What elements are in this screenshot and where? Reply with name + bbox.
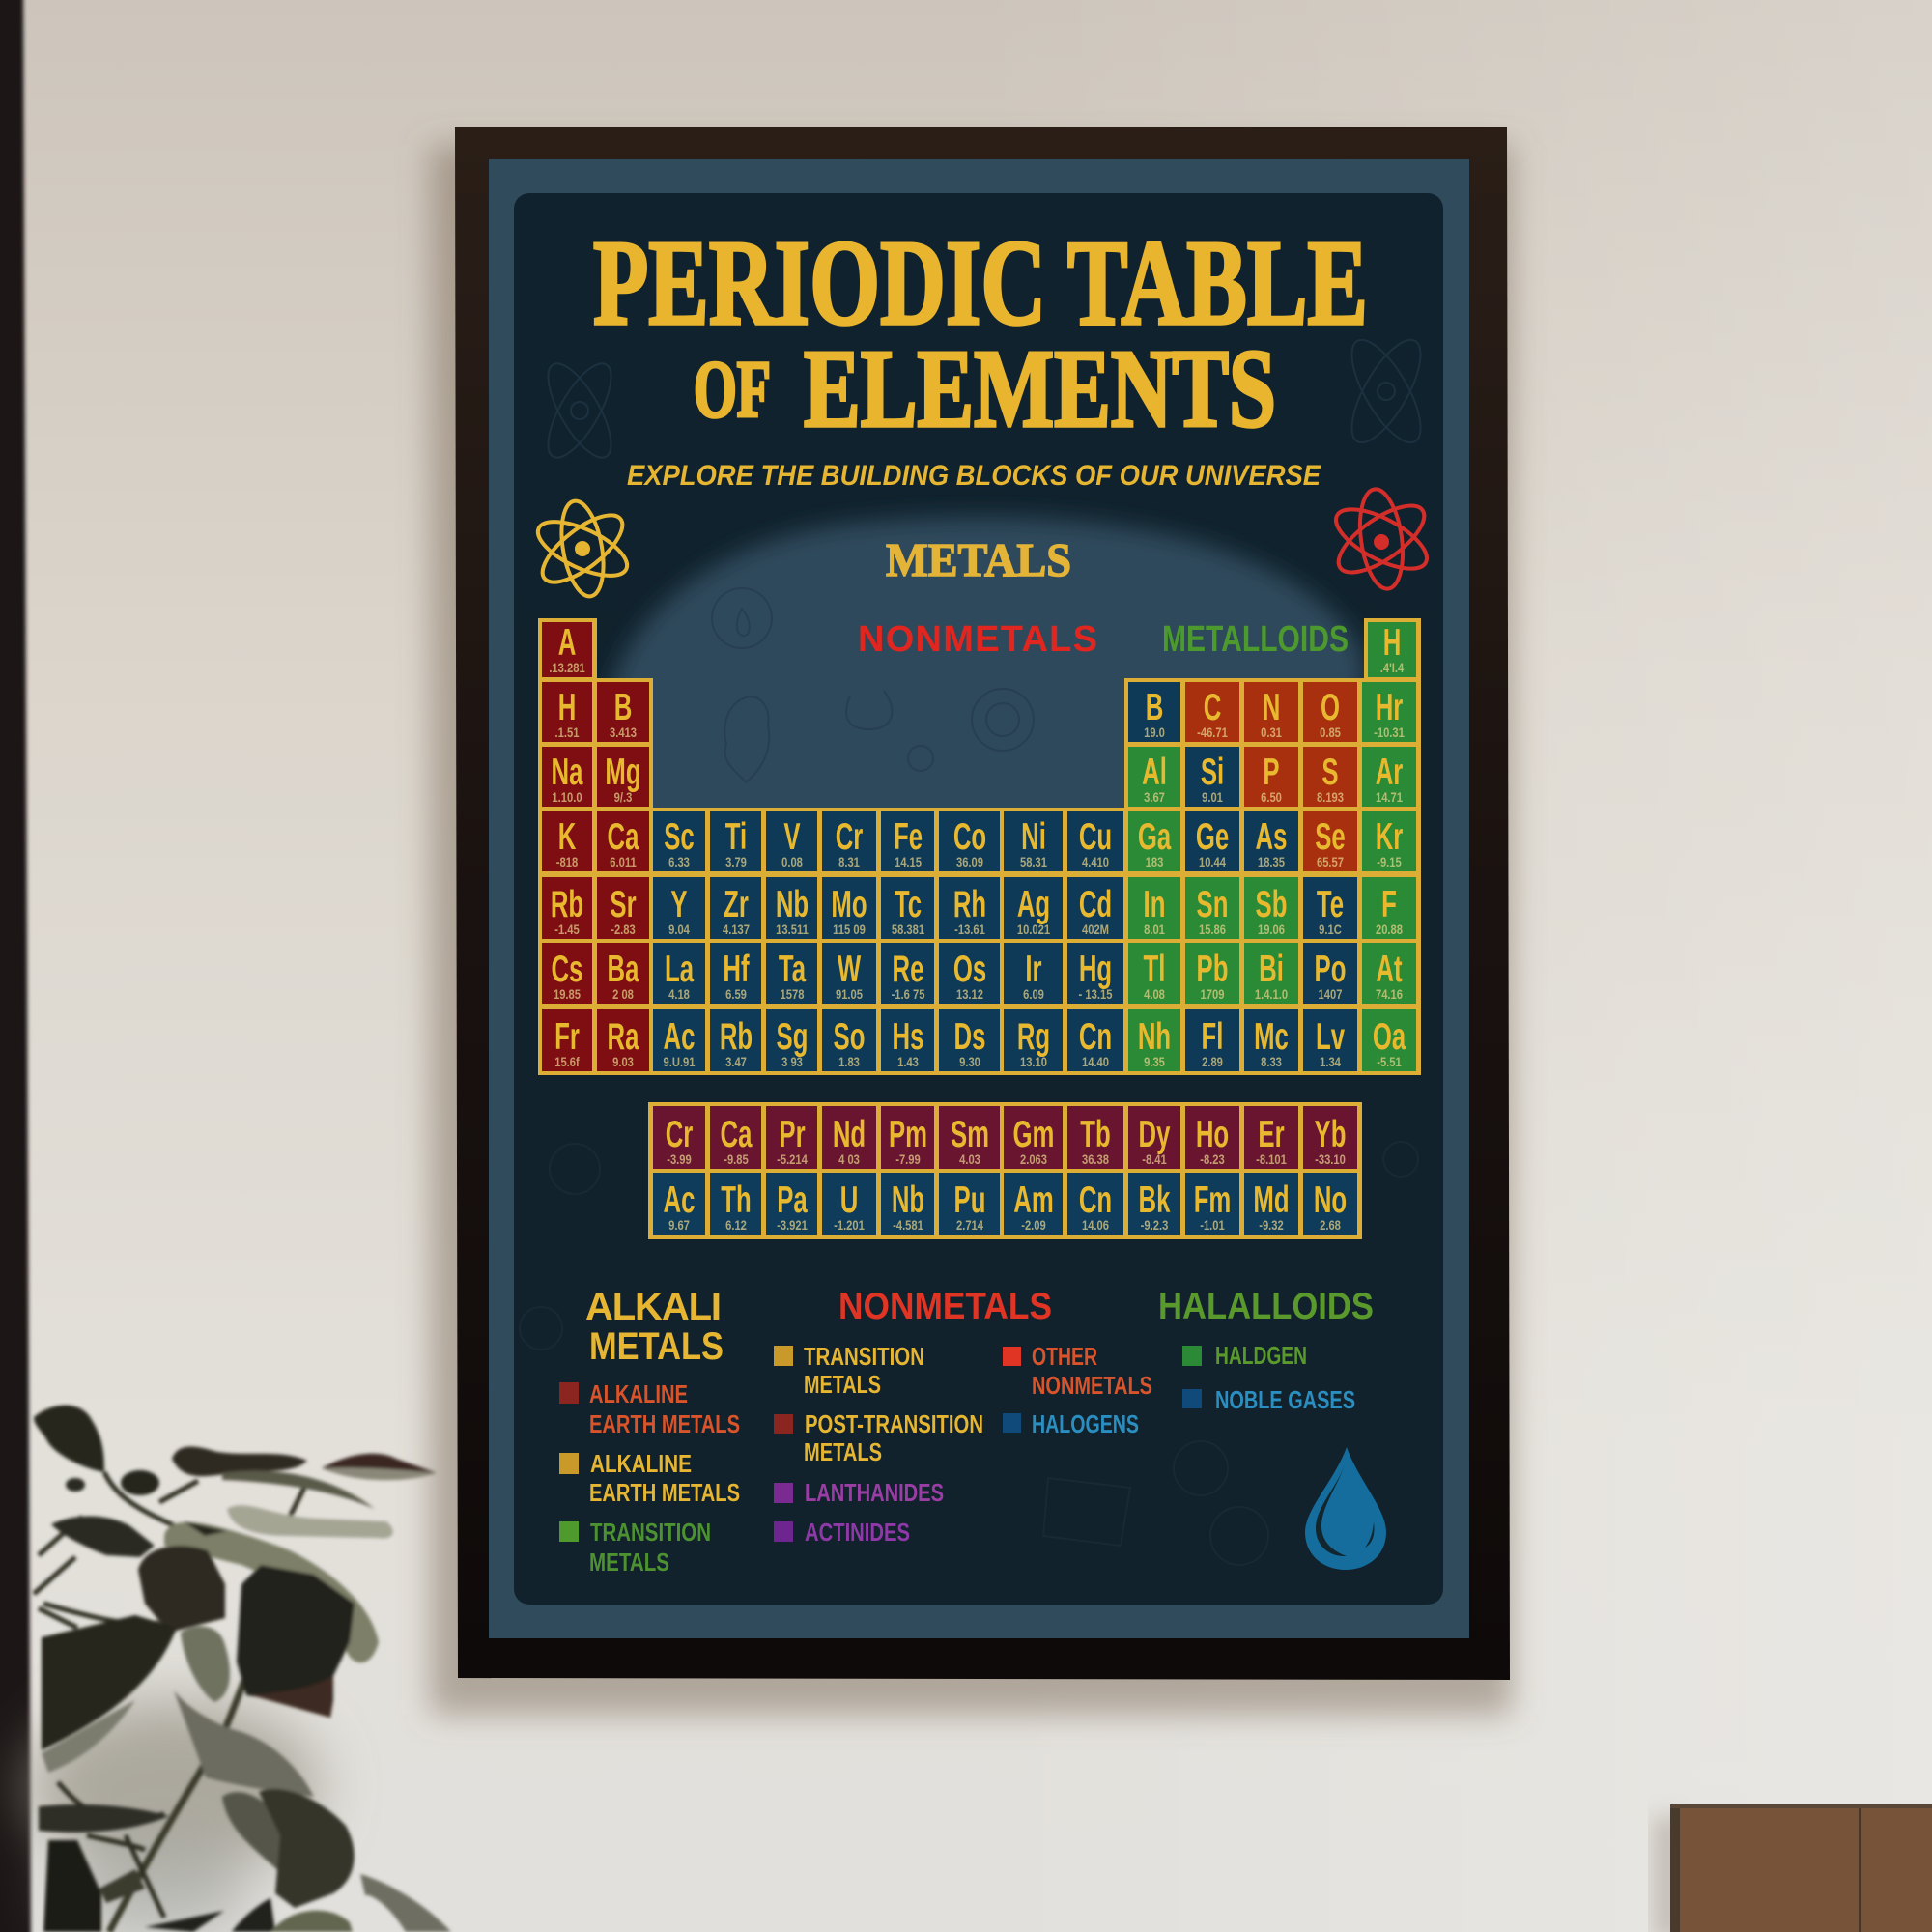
table row 3: Al — [1142, 752, 1167, 793]
table row 5: 4.137 — [722, 922, 750, 937]
table row 7: 1.83 — [838, 1054, 860, 1069]
table row 5: Zr — [724, 884, 748, 925]
actinide row: -3.921 — [777, 1217, 807, 1233]
table row 6: 13.12 — [955, 986, 983, 1002]
legend heading: alkali metals — [585, 1286, 724, 1368]
lanthanide row: Yb — [1315, 1114, 1346, 1155]
table row 4: 6.33 — [668, 854, 690, 869]
table row 7: 15.6f — [554, 1054, 580, 1069]
table row 5 — [542, 877, 1416, 939]
table row 4: 58.31 — [1019, 854, 1047, 869]
icon: water drop — [1305, 1447, 1386, 1570]
table row 6: 19.85 — [554, 986, 581, 1002]
table row 5: Rh — [952, 884, 986, 925]
table row 2: 0.31 — [1261, 724, 1282, 740]
table row 7: Fl — [1202, 1016, 1223, 1058]
table row 2: B — [1146, 687, 1163, 728]
table row 4: Cu — [1079, 816, 1112, 858]
actinide row: 6.12 — [725, 1217, 746, 1233]
table row 5: Ag — [1016, 884, 1050, 925]
table row 3: P — [1263, 752, 1280, 793]
table row 7: Nh — [1138, 1016, 1171, 1058]
actinide row: -1.01 — [1200, 1217, 1225, 1233]
poster dark inner panel — [514, 193, 1443, 1605]
table row 7: 9.U.91 — [663, 1054, 696, 1069]
legend item: lanthanides: LANTHANIDES — [805, 1478, 944, 1507]
table row 4: Se — [1315, 816, 1346, 858]
table row 6: -1.6 75 — [891, 986, 924, 1002]
table row 6: La — [665, 949, 694, 990]
legend item: post-transition metals: METALS — [804, 1437, 882, 1466]
table row 7: Ra — [608, 1016, 639, 1058]
subtitle: EXPLORE THE BUILDING BLOCKS OF OUR UNIVERSE — [627, 460, 1321, 492]
table row 7: 3 93 — [781, 1054, 802, 1069]
actinide row: Pa — [777, 1179, 807, 1221]
legend item: alkaline earth metals gold: ALKALINE — [590, 1449, 692, 1478]
table row 6: 1.4.1.0 — [1255, 986, 1288, 1002]
table row 5: 20.88 — [1376, 922, 1403, 937]
table row 1: .4'I.4 — [1380, 660, 1404, 675]
table row 5: F — [1381, 884, 1397, 925]
potted plant leaves — [34, 1406, 451, 1932]
table row 2: 3.413 — [610, 724, 637, 740]
lanthanide row: Cr — [666, 1114, 693, 1155]
actinide row: Nb — [891, 1179, 924, 1221]
table row 7: Fr — [554, 1016, 580, 1058]
table row 5: 8.01 — [1144, 922, 1165, 937]
legend item: other nonmetals: NONMETALS — [1032, 1371, 1152, 1400]
table row 7: Cn — [1079, 1016, 1112, 1058]
table row 7: 14.40 — [1082, 1054, 1109, 1069]
lanthanide row: Gm — [1012, 1114, 1054, 1155]
table row 3: 8.193 — [1317, 789, 1344, 805]
table row 7: 9.30 — [959, 1054, 980, 1069]
table row 5: Y — [670, 884, 688, 925]
dark door frame strip at left edge — [0, 0, 31, 1932]
legend item: lanthanides — [774, 1478, 944, 1507]
lanthanide row: Er — [1258, 1114, 1285, 1155]
table row 5: Rb — [551, 884, 583, 925]
legend item: alkaline earth metals red — [559, 1379, 740, 1438]
lanthanide row — [653, 1106, 1357, 1169]
table row 3: S — [1321, 752, 1339, 793]
table row 6: Pb — [1197, 949, 1228, 990]
table row 5: Mo — [831, 884, 867, 925]
table row 2: B — [614, 687, 632, 728]
table row 4: Ni — [1021, 816, 1045, 858]
heading: metals: METALS — [886, 533, 1071, 586]
table row 4: Ge — [1196, 816, 1229, 858]
table row 7: Ac — [664, 1016, 695, 1058]
table row 6: Po — [1315, 949, 1346, 990]
title: ELEMENTS — [804, 327, 1276, 451]
legend item: transition metals green: TRANSITION — [590, 1518, 711, 1547]
table row 4: Ti — [724, 816, 747, 858]
table row 6: 1709 — [1201, 986, 1224, 1002]
legend item: noble gases — [1182, 1385, 1355, 1414]
lanthanide row: -8.41 — [1142, 1151, 1167, 1167]
table row 6: 1407 — [1319, 986, 1342, 1002]
legend item: actinides: ACTINIDES — [805, 1518, 910, 1547]
lanthanide row: Nd — [833, 1114, 866, 1155]
table row 7: Hs — [892, 1016, 923, 1058]
frame shadow on wall — [430, 145, 1512, 1715]
table row 6: 74.16 — [1376, 986, 1403, 1002]
table row 7: So — [834, 1016, 865, 1058]
lanthanide row: Ca — [720, 1114, 752, 1155]
wooden furniture corner — [1654, 1804, 1932, 1932]
table row 4: As — [1256, 816, 1287, 858]
table row 4: Kr — [1376, 816, 1403, 858]
actinide row: -2.09 — [1021, 1217, 1045, 1233]
table row 7: Mc — [1254, 1016, 1289, 1058]
table row 6: Ir — [1025, 949, 1041, 990]
lanthanide row: Sm — [950, 1114, 989, 1155]
table row 4: 4.410 — [1082, 854, 1109, 869]
table row 4: 18.35 — [1258, 854, 1285, 869]
table row 4: Ga — [1138, 816, 1171, 858]
table row 6: Bi — [1259, 949, 1284, 990]
table row 5: 9.1C — [1319, 922, 1342, 937]
lanthanide row: -5.214 — [777, 1151, 807, 1167]
actinide row: Ac — [664, 1179, 695, 1221]
table row 5: Sb — [1256, 884, 1287, 925]
table row 4: 183 — [1146, 854, 1163, 869]
table row 7 — [542, 1009, 1416, 1071]
table row 7: Lv — [1316, 1016, 1345, 1058]
table row 7: Rb — [719, 1016, 753, 1058]
actinide row: -1.201 — [834, 1217, 865, 1233]
table row 5: 10.021 — [1016, 922, 1050, 937]
table row 6 — [542, 943, 1416, 1004]
legend heading: alkali metals: METALS — [589, 1325, 724, 1368]
table row 5: In — [1144, 884, 1165, 925]
table row 4: 65.57 — [1317, 854, 1344, 869]
lanthanide row: 2.063 — [1019, 1151, 1047, 1167]
actinide row: 9.67 — [668, 1217, 690, 1233]
heading: metalloids: METALLOIDS — [1162, 619, 1349, 660]
actinide row: Pu — [953, 1179, 985, 1221]
faint doodles: atoms and circles — [520, 330, 1434, 1565]
table row 7: Sg — [776, 1016, 808, 1058]
table row 4: 10.44 — [1199, 854, 1226, 869]
table row 3: Mg — [605, 752, 641, 793]
table row 3: Si — [1201, 752, 1224, 793]
actinide row: Cn — [1079, 1179, 1112, 1221]
table row 7: Ds — [953, 1016, 985, 1058]
table row 7: 2.89 — [1202, 1054, 1223, 1069]
table row 6: 6.09 — [1023, 986, 1043, 1002]
table row 6: 2 08 — [612, 986, 634, 1002]
title: PERIODIC TABLE — [593, 216, 1368, 351]
table row 4: Ca — [608, 816, 639, 858]
table row 4: 6.011 — [610, 854, 637, 869]
lanthanide row: 4.03 — [959, 1151, 980, 1167]
table row 5: Sn — [1197, 884, 1228, 925]
table row 6: 91.05 — [836, 986, 863, 1002]
table row 6: Os — [952, 949, 986, 990]
table row 6: W — [838, 949, 861, 990]
table row 6: 6.59 — [725, 986, 746, 1002]
heading: nonmetals: NONMETALS — [858, 619, 1097, 660]
table row 5: -2.83 — [611, 922, 636, 937]
table row 5: 402M — [1082, 922, 1109, 937]
title: OF — [694, 345, 771, 435]
gold grid: main table — [538, 618, 1421, 1075]
lanthanide row: 4 03 — [838, 1151, 860, 1167]
table row 6: Cs — [552, 949, 582, 990]
legend item: other nonmetals: OTHER — [1032, 1342, 1097, 1371]
actinide row: Bk — [1139, 1179, 1170, 1221]
table row 2: O — [1321, 687, 1340, 728]
lighter arch behind table — [604, 517, 1364, 831]
lanthanide row: -7.99 — [895, 1151, 920, 1167]
title — [593, 216, 1368, 451]
table row 5: 19.06 — [1258, 922, 1285, 937]
table row 5: 115 09 — [833, 922, 866, 937]
table row 3: 9.01 — [1202, 789, 1223, 805]
table row 4: Co — [952, 816, 986, 858]
table row 3 — [542, 747, 1416, 807]
table row 3: 3.67 — [1144, 789, 1165, 805]
legend item: transition metals gold: TRANSITION — [804, 1342, 924, 1371]
lanthanide row: -8.101 — [1256, 1151, 1287, 1167]
table row 4 — [542, 811, 1416, 871]
legend item: halogens — [1003, 1409, 1139, 1438]
table row 4: 0.08 — [781, 854, 802, 869]
legend item: post-transition metals — [774, 1409, 983, 1466]
legend item: post-transition metals: POST-TRANSITION — [805, 1409, 983, 1438]
table row 5: 58.381 — [891, 922, 924, 937]
actinide row: -9.32 — [1259, 1217, 1284, 1233]
table row 3: Ar — [1376, 752, 1403, 793]
lower table: lanthanide and actinide rows — [653, 1106, 1357, 1235]
actinide row: No — [1314, 1179, 1347, 1221]
table row 2: 19.0 — [1144, 724, 1165, 740]
table row 2: H — [558, 687, 576, 728]
legend heading: nonmetals: NONMETALS — [838, 1286, 1052, 1327]
actinide row: 14.06 — [1082, 1217, 1109, 1233]
gold grid: lower table — [648, 1102, 1362, 1239]
legend item: transition metals green — [559, 1518, 711, 1577]
poster outer mat — [489, 159, 1469, 1638]
table row 6: Hf — [723, 949, 749, 990]
legend item: alkaline earth metals gold: EARTH METALS — [589, 1478, 740, 1507]
actinide row: 2.714 — [955, 1217, 983, 1233]
table row 2 — [542, 682, 1416, 742]
lanthanide row: -3.99 — [667, 1151, 692, 1167]
table row 1 — [542, 622, 1416, 677]
main periodic table — [542, 622, 1416, 1071]
table row 7: Oa — [1373, 1016, 1406, 1058]
legend item: transition metals gold: METALS — [804, 1370, 881, 1399]
soft grey shading around plant — [29, 1700, 319, 1932]
table row 2: 0.85 — [1320, 724, 1341, 740]
table row 7: 9.03 — [612, 1054, 634, 1069]
lanthanide row: -9.85 — [724, 1151, 748, 1167]
table row 3: 14.71 — [1376, 789, 1403, 805]
table row 7: -5.51 — [1377, 1054, 1402, 1069]
lanthanide row: Dy — [1139, 1114, 1170, 1155]
table row 7: 13.10 — [1019, 1054, 1047, 1069]
picture frame — [455, 127, 1510, 1680]
actinide row: 2.68 — [1320, 1217, 1341, 1233]
table row 1: A — [558, 622, 576, 664]
table row 3: Na — [552, 752, 582, 793]
table row 7: 9.35 — [1144, 1054, 1165, 1069]
table row 6: - 13.15 — [1079, 986, 1112, 1002]
table row 4: 3.79 — [725, 854, 746, 869]
table row 5: Te — [1317, 884, 1344, 925]
legend item: alkaline earth metals gold — [559, 1449, 740, 1507]
actinide row: Am — [1013, 1179, 1053, 1221]
lanthanide row: 36.38 — [1082, 1151, 1109, 1167]
icon: yellow atom — [530, 497, 635, 600]
table row 2: -46.71 — [1197, 724, 1228, 740]
table row 6: Ta — [778, 949, 806, 990]
lanthanide row: Ho — [1196, 1114, 1229, 1155]
table row 6: Re — [892, 949, 923, 990]
table row 1: .13.281 — [549, 660, 585, 675]
table row 3: 1.10.0 — [552, 789, 582, 805]
table row 1: H — [1383, 622, 1401, 664]
icon: red atom — [1327, 487, 1435, 591]
table row 5: Tc — [894, 884, 922, 925]
table row 4: -9.15 — [1377, 854, 1402, 869]
actinide row: -4.581 — [893, 1217, 923, 1233]
legend item: transition metals gold — [774, 1342, 924, 1399]
legend item: transition metals green: METALS — [589, 1548, 669, 1577]
table row 6: At — [1376, 949, 1403, 990]
table row 4: 36.09 — [955, 854, 983, 869]
table row 7: 1.34 — [1320, 1054, 1341, 1069]
lanthanide row: -33.10 — [1315, 1151, 1346, 1167]
legend item: alkaline earth metals red: EARTH METALS — [589, 1409, 740, 1438]
actinide row: Fm — [1194, 1179, 1231, 1221]
table row 5: 15.86 — [1199, 922, 1226, 937]
table row 4: Fe — [893, 816, 923, 858]
actinide row: Md — [1253, 1179, 1290, 1221]
legend heading: halalloids: HALALLOIDS — [1158, 1286, 1374, 1327]
table row 2: Hr — [1376, 687, 1403, 728]
legend item: alkaline earth metals red: ALKALINE — [589, 1379, 688, 1408]
actinide row — [653, 1173, 1357, 1235]
table row 4: K — [558, 816, 576, 858]
lanthanide row: Pr — [779, 1114, 805, 1155]
table row 2: C — [1204, 687, 1221, 728]
table row 5: Sr — [610, 884, 637, 925]
legend item: other nonmetals — [1003, 1342, 1152, 1400]
table row 5: -13.61 — [954, 922, 984, 937]
table row 2: N — [1263, 687, 1280, 728]
lanthanide row: Pm — [888, 1114, 927, 1155]
actinide row: U — [840, 1179, 858, 1221]
table row 5: Nb — [775, 884, 809, 925]
table row 4: Sc — [664, 816, 695, 858]
table row 4: -818 — [556, 854, 578, 869]
legend item: haldgen: HALDGEN — [1215, 1341, 1307, 1370]
legend item: haldgen — [1182, 1341, 1307, 1370]
table row 7: 3.47 — [725, 1054, 746, 1069]
lanthanide row: -8.23 — [1200, 1151, 1225, 1167]
legend item: actinides — [774, 1518, 910, 1547]
table row 2: .1.51 — [555, 724, 579, 740]
table row 5: Cd — [1079, 884, 1112, 925]
table row 5: 13.511 — [776, 922, 808, 937]
table row 4: 8.31 — [838, 854, 860, 869]
table row 7: 1.43 — [897, 1054, 918, 1069]
table row 5: -1.45 — [554, 922, 580, 937]
table row 6: 4.18 — [668, 986, 690, 1002]
table row 4: Cr — [836, 816, 863, 858]
actinide row: Th — [721, 1179, 751, 1221]
table row 6: Tl — [1144, 949, 1165, 990]
table row 6: 1578 — [780, 986, 804, 1002]
table row 3: 6.50 — [1261, 789, 1282, 805]
table row 4: V — [783, 816, 800, 858]
table row 6: 4.08 — [1144, 986, 1165, 1002]
table row 6: Hg — [1079, 949, 1112, 990]
table row 5: 9.04 — [668, 922, 690, 937]
table row 7: 8.33 — [1261, 1054, 1282, 1069]
table row 7: Rg — [1016, 1016, 1050, 1058]
legend item: noble gases: NOBLE GASES — [1215, 1385, 1355, 1414]
legend item: halogens: HALOGENS — [1032, 1409, 1139, 1438]
lanthanide row: Tb — [1080, 1114, 1111, 1155]
table row 3: 9/.3 — [614, 789, 632, 805]
actinide row: -9.2.3 — [1141, 1217, 1168, 1233]
table row 2: -10.31 — [1374, 724, 1405, 740]
table row 6: Ba — [608, 949, 639, 990]
table row 4: 14.15 — [894, 854, 922, 869]
legend heading: alkali metals: ALKALI — [585, 1286, 722, 1328]
